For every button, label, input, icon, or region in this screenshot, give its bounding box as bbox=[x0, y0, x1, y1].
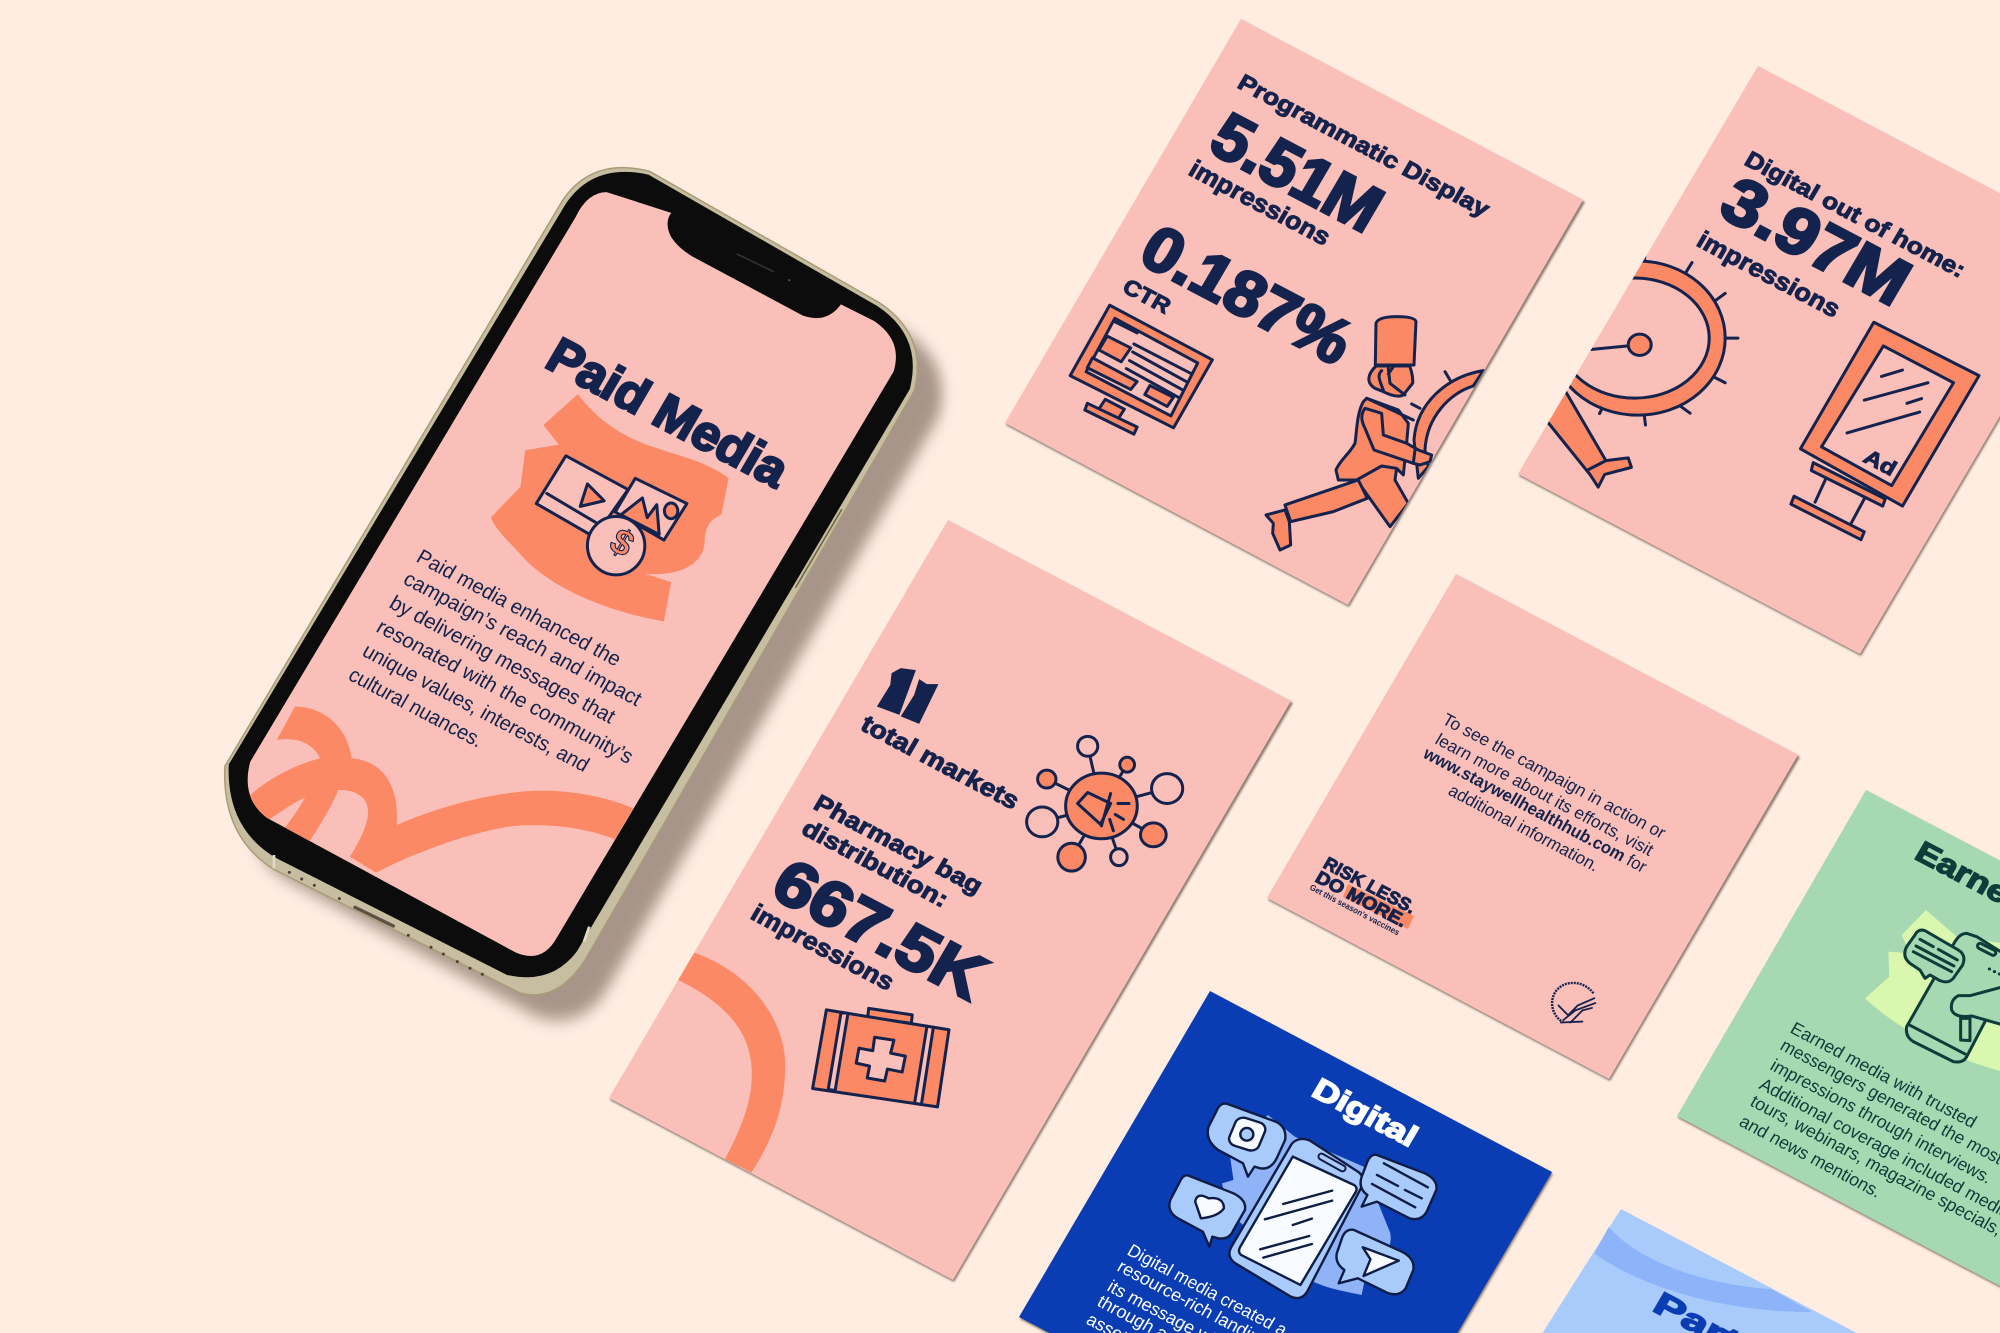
heading: paid media: Paid Media bbox=[537, 327, 800, 499]
text block: call to action: additional information. bbox=[1445, 780, 1603, 875]
decorative arc bbox=[678, 953, 785, 1173]
orange squiggle bbox=[248, 707, 633, 873]
icon: network with megaphone bbox=[1027, 736, 1183, 871]
panel: digital out of home card bbox=[1518, 66, 2000, 656]
phone bezel bbox=[229, 172, 913, 977]
text block: earned media description: and news mentions. bbox=[1736, 1111, 1885, 1202]
stat: 3.97M: 3.97M bbox=[1709, 162, 1923, 319]
heading: pharmacy bag: Pharmacy bag bbox=[809, 790, 987, 900]
text block: paid media description: cultural nuances. bbox=[344, 663, 487, 752]
illustration: wheel and walking leg bbox=[1545, 250, 1738, 487]
phone body bbox=[225, 168, 917, 995]
panel: digital card bbox=[1019, 991, 1553, 1333]
icon: phone with speech bubble bbox=[1865, 910, 2000, 1072]
text block: earned media description bbox=[1736, 1018, 2000, 1239]
panel: earned media card bbox=[1677, 790, 2000, 1298]
phone shadow bbox=[252, 199, 942, 1020]
label: impressions: impressions bbox=[746, 899, 899, 996]
bottom edge port and speakers bbox=[274, 855, 589, 974]
panel: campaign website card bbox=[1267, 574, 1800, 1081]
label: Ad: Ad bbox=[1859, 445, 1900, 481]
logo: risk less do more bbox=[1308, 853, 1419, 937]
logo: risk less do more: DO MORE. bbox=[1312, 867, 1411, 931]
text block: call to action: learn more about its efforts, visit bbox=[1432, 729, 1657, 860]
logo: risk less do more: Get this season's vaccines bbox=[1308, 882, 1402, 937]
label: impressions: impressions bbox=[1184, 155, 1335, 251]
details on upper phone: speaker, camera, side button bbox=[737, 254, 842, 588]
stat: 0.187%: 0.187% bbox=[1129, 211, 1365, 378]
label: total markets: total markets bbox=[856, 710, 1024, 815]
icon: billboard bbox=[1791, 322, 1979, 540]
heading: distribution: distribution: bbox=[797, 815, 953, 913]
stat: 5.51M: 5.51M bbox=[1199, 98, 1396, 246]
dollar sign: $ bbox=[603, 520, 642, 565]
heading: programmatic display: Programmatic Display bbox=[1233, 69, 1495, 222]
text block: paid media description: unique values, interests, and bbox=[358, 639, 593, 777]
icon: monitor bbox=[1070, 305, 1212, 434]
text block: call to action: To see the campaign in action or bbox=[1439, 709, 1670, 843]
text block: earned media description: impressions through interviews. bbox=[1767, 1055, 1996, 1188]
text block: call to action: www.staywellhealthhub.com for bbox=[1419, 743, 1651, 877]
illustration: running figure with wheel bbox=[1266, 317, 1483, 550]
text block: paid media description: Paid media enhanced the bbox=[412, 545, 625, 671]
heading: digital out of home: Digital out of home: bbox=[1740, 146, 1970, 282]
text block: paid media description bbox=[344, 545, 646, 777]
decorative band bbox=[1594, 1227, 1812, 1312]
text block: earned media description: Earned media with trusted bbox=[1787, 1018, 1980, 1132]
label: impressions: impressions bbox=[1692, 226, 1845, 323]
panel: total markets card bbox=[609, 520, 1293, 1282]
label: CTR: CTR bbox=[1118, 274, 1175, 319]
text block: paid media description: by delivering messages that bbox=[385, 591, 619, 728]
panel: programmatic display card bbox=[1005, 19, 1585, 607]
heading: digital: Digital bbox=[1306, 1073, 1423, 1154]
icon: first aid kit bbox=[813, 1008, 949, 1107]
paid media blob and icon bbox=[491, 394, 729, 621]
icon: phone with social bubbles bbox=[1169, 1104, 1437, 1298]
phone screen bbox=[248, 192, 896, 956]
text block: paid media description: resonated with the community’s bbox=[372, 615, 637, 769]
panel: partner card bbox=[1500, 1209, 1963, 1333]
phone mockup bbox=[225, 168, 942, 1020]
text block: paid media description: campaign’s reach and impact bbox=[399, 567, 646, 711]
stat: 667.5K: 667.5K bbox=[761, 845, 999, 1013]
logo: HHS eagle seal bbox=[1552, 983, 1595, 1023]
stat: 11: 11 bbox=[879, 675, 935, 724]
logo: risk less do more: RISK LESS. bbox=[1320, 853, 1419, 918]
